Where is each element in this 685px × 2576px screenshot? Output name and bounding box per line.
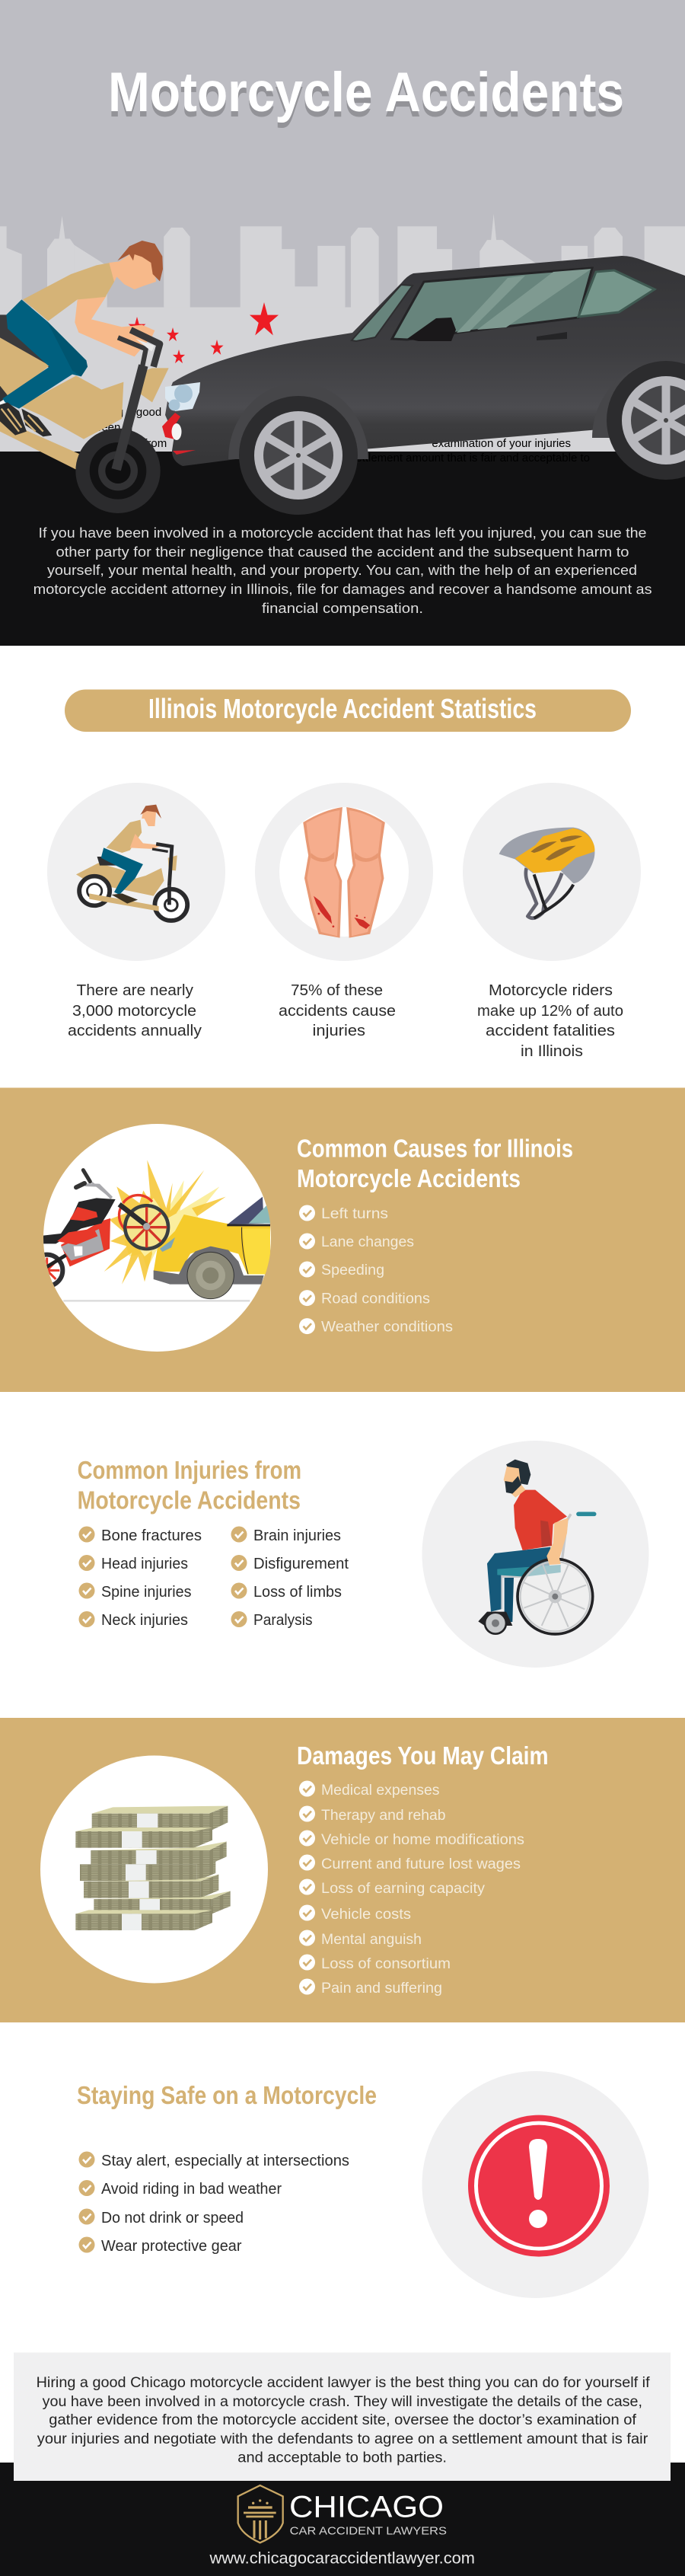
title: Motorcycle Accidents <box>108 62 624 123</box>
icon: warning sign <box>468 2115 610 2257</box>
heading: Motorcycle Accidents <box>297 1164 521 1192</box>
panel: hero <box>0 0 685 646</box>
front wheel <box>75 429 161 513</box>
intro paragraph: financial compensation. <box>262 600 423 616</box>
caption <box>477 982 623 1060</box>
caption <box>279 982 396 1039</box>
icon: rider on motorcycle <box>76 805 187 921</box>
fork and handlebars <box>116 330 160 470</box>
checklist: Brain injuries <box>253 1527 341 1544</box>
panel: common causes <box>0 1087 685 1392</box>
stray paragraph fragments behind the illustration: evidence from <box>95 437 167 450</box>
heading <box>297 1135 573 1192</box>
seat <box>0 314 51 368</box>
rear wheel <box>0 400 6 405</box>
stray paragraph fragments behind the illustration: examination of your injuries <box>432 437 571 450</box>
rear wheel arch <box>592 422 609 438</box>
wing mirror <box>407 318 456 341</box>
intro paragraph: If you have been involved in a motorcycle accident that has left you injured, you can sue the <box>38 525 647 541</box>
stray paragraph fragments behind the illustration: Hiring a good <box>94 406 161 419</box>
heading pill: Illinois Motorcycle Accident Statistics <box>148 693 537 724</box>
heading: Staying Safe on a Motorcycle <box>77 2081 377 2109</box>
rear wheel <box>607 361 685 480</box>
icon: shield with pillar <box>238 2485 283 2542</box>
icon: impact stars <box>129 302 279 363</box>
checklist: Mental anguish <box>321 1932 422 1948</box>
closing paragraph box: gather evidence from the motorcycle accident site, oversee the doctor’s examination of <box>49 2412 637 2428</box>
checklist: Bone fractures <box>101 1527 202 1544</box>
stat: injuries <box>255 783 433 1039</box>
stray paragraph fragments behind the illustration: settlement amount that is fair and acceptable to <box>350 452 590 464</box>
arm <box>75 295 155 356</box>
heading pill <box>65 690 631 732</box>
checklist: Disfigurement <box>253 1556 349 1572</box>
caption: Motorcycle riders <box>489 982 613 999</box>
heading: Common Causes for Illinois <box>297 1135 573 1163</box>
caption: in Illinois <box>521 1043 583 1060</box>
logo: CHICAGO <box>289 2491 444 2524</box>
panel: common injuries <box>78 1441 649 1668</box>
intro paragraph <box>33 525 652 616</box>
shirt <box>23 263 114 321</box>
rear quarter window <box>578 270 655 317</box>
city skyline <box>0 214 685 452</box>
checklist <box>79 2152 349 2255</box>
headlight <box>165 382 200 411</box>
caption: make up 12% of auto <box>477 1003 623 1020</box>
checklist: Stay alert, especially at intersections <box>101 2153 349 2169</box>
checklist: Medical expenses <box>321 1783 440 1799</box>
intro paragraph: motorcycle accident attorney in Illinois, file for damages and recover a handsome amount as <box>33 581 652 597</box>
front wheel arch <box>228 422 368 459</box>
bumper light <box>162 413 180 439</box>
website url: www.chicagocaraccidentlawyer.com <box>209 2550 475 2568</box>
bike frame <box>0 337 49 398</box>
checklist: Do not drink or speed <box>101 2210 244 2226</box>
side window <box>392 268 592 340</box>
closing paragraph box: and acceptable to both parties. <box>237 2450 447 2466</box>
checklist: Loss of earning capacity <box>321 1881 486 1897</box>
window reflections <box>457 269 591 333</box>
title: Motorcycle Accidents <box>108 67 624 129</box>
intro paragraph: other party for their negligence that caused the accident and the subsequent harm to <box>56 544 629 560</box>
closing paragraph box: Hiring a good Chicago motorcycle accident lawyer is the best thing you can do for yourself if <box>37 2375 650 2391</box>
windshield <box>352 285 413 341</box>
checklist: Lane changes <box>321 1234 414 1250</box>
heading: Common Injuries from <box>78 1456 301 1484</box>
icon: helmet <box>499 828 594 918</box>
intro paragraph: yourself, your mental health, and your property. You can, with the help of an experienced <box>47 562 637 578</box>
face and neck <box>109 251 156 289</box>
checklist <box>299 1205 453 1336</box>
front wheel <box>239 396 358 515</box>
illustration: rider on motorcycle <box>0 241 169 513</box>
icon: injured legs <box>303 807 385 938</box>
checklist <box>299 1780 524 1997</box>
checklist: Vehicle costs <box>321 1907 411 1923</box>
checklist: Avoid riding in bad weather <box>101 2181 282 2198</box>
closing paragraph box <box>14 2353 671 2481</box>
shoes <box>0 402 27 436</box>
stray paragraph fragments behind the illustration <box>94 406 590 464</box>
checklist: Spine injuries <box>101 1584 192 1601</box>
heading: Motorcycle Accidents <box>78 1486 301 1515</box>
checklist: Therapy and rehab <box>321 1808 446 1824</box>
checklist: Paralysis <box>253 1612 312 1629</box>
caption: 3,000 motorcycle <box>72 1003 196 1020</box>
panel: footer <box>0 2353 685 2576</box>
caption: 75% of these <box>291 982 383 999</box>
checklist: Pain and suffering <box>321 1981 442 1997</box>
heading: Damages You May Claim <box>297 1741 548 1770</box>
checklist: Current and future lost wages <box>321 1856 521 1872</box>
caption: injuries <box>312 1023 365 1039</box>
closing paragraph box: your injuries and negotiate with the defendants to agree on a settlement amount that is fair <box>37 2431 648 2447</box>
hair <box>117 241 163 281</box>
illustration: stacks of cash <box>75 1806 231 1930</box>
checklist: Speeding <box>321 1262 384 1278</box>
illustration: car <box>162 256 685 515</box>
checklist <box>79 1526 349 1629</box>
door handle <box>537 332 567 340</box>
caption <box>68 982 202 1039</box>
checklist: Head injuries <box>101 1556 188 1572</box>
panel: staying safe <box>77 2071 648 2298</box>
checklist: Loss of limbs <box>253 1584 342 1601</box>
headlight cowl <box>139 368 169 402</box>
checklist: Loss of consortium <box>321 1956 451 1972</box>
checklist: Neck injuries <box>101 1612 188 1629</box>
caption: accident fatalities <box>486 1023 615 1039</box>
caption: accidents cause <box>279 1003 396 1020</box>
illustration: man in wheelchair <box>478 1460 594 1634</box>
logo <box>238 2485 447 2542</box>
closing paragraph box: you have been involved in a motorcycle crash. They will investigate the details of the case, <box>43 2394 642 2410</box>
caption: accidents annually <box>68 1023 202 1039</box>
checklist: Road conditions <box>321 1291 430 1307</box>
checklist: Wear protective gear <box>101 2238 242 2255</box>
checklist: Left turns <box>321 1206 388 1222</box>
panel: damages <box>0 1718 685 2022</box>
stray paragraph fragments behind the illustration: been in <box>95 421 132 434</box>
logo: CAR ACCIDENT LAWYERS <box>290 2525 447 2538</box>
stat: annual accidents <box>47 783 225 1039</box>
sky <box>0 0 685 308</box>
checklist: Weather conditions <box>321 1320 453 1336</box>
jeans <box>2 299 88 409</box>
car body <box>165 256 685 466</box>
ground <box>0 452 685 646</box>
checklist: Vehicle or home modifications <box>321 1832 524 1848</box>
stat: fatalities <box>463 783 641 1060</box>
illustration: motorcycle crashing into car <box>31 1160 270 1301</box>
panel: statistics <box>47 690 641 1060</box>
heading <box>78 1456 301 1515</box>
caption: There are nearly <box>76 982 193 999</box>
